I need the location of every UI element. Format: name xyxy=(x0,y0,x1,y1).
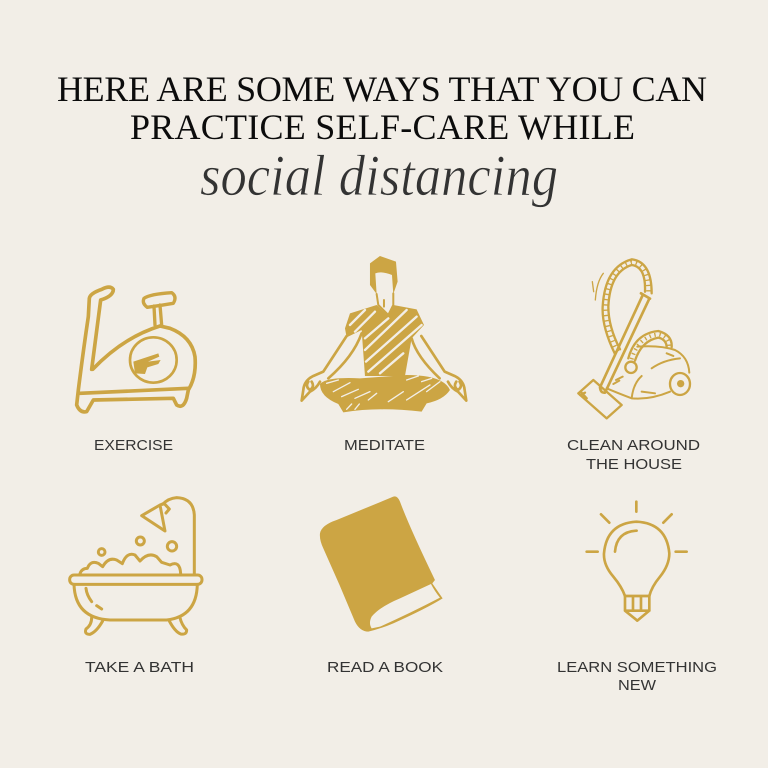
icon: vacuum cleaner xyxy=(578,259,690,418)
label: clean around the house xyxy=(567,437,700,473)
label: learn something new: LEARN SOMETHING xyxy=(557,659,717,676)
label: clean around the house: CLEAN AROUND xyxy=(567,437,700,454)
panel: exercise xyxy=(77,287,195,454)
icon: book xyxy=(320,496,443,632)
script subtitle: social distancing xyxy=(200,143,558,208)
label: take a bath: TAKE A BATH xyxy=(85,659,194,676)
label: exercise: EXERCISE xyxy=(94,437,173,454)
panel: learn something new xyxy=(557,502,717,694)
label: read a book: READ A BOOK xyxy=(327,659,443,676)
panel: meditate xyxy=(302,256,466,454)
label: clean around the house: THE HOUSE xyxy=(586,456,682,473)
icon: bathtub xyxy=(70,498,202,634)
icon: light bulb xyxy=(587,502,687,621)
panel: take a bath xyxy=(70,498,202,676)
label: learn something new: NEW xyxy=(618,677,657,694)
icon: meditating person xyxy=(302,256,466,412)
panel: clean around the house xyxy=(567,259,700,473)
label: learn something new xyxy=(557,659,717,694)
label: meditate: MEDITATE xyxy=(344,437,425,454)
panel: read a book xyxy=(320,496,443,676)
title xyxy=(57,69,707,147)
title: PRACTICE SELF-CARE WHILE xyxy=(130,107,635,147)
icon: exercise bike xyxy=(77,287,195,412)
title: HERE ARE SOME WAYS THAT YOU CAN xyxy=(57,69,707,109)
